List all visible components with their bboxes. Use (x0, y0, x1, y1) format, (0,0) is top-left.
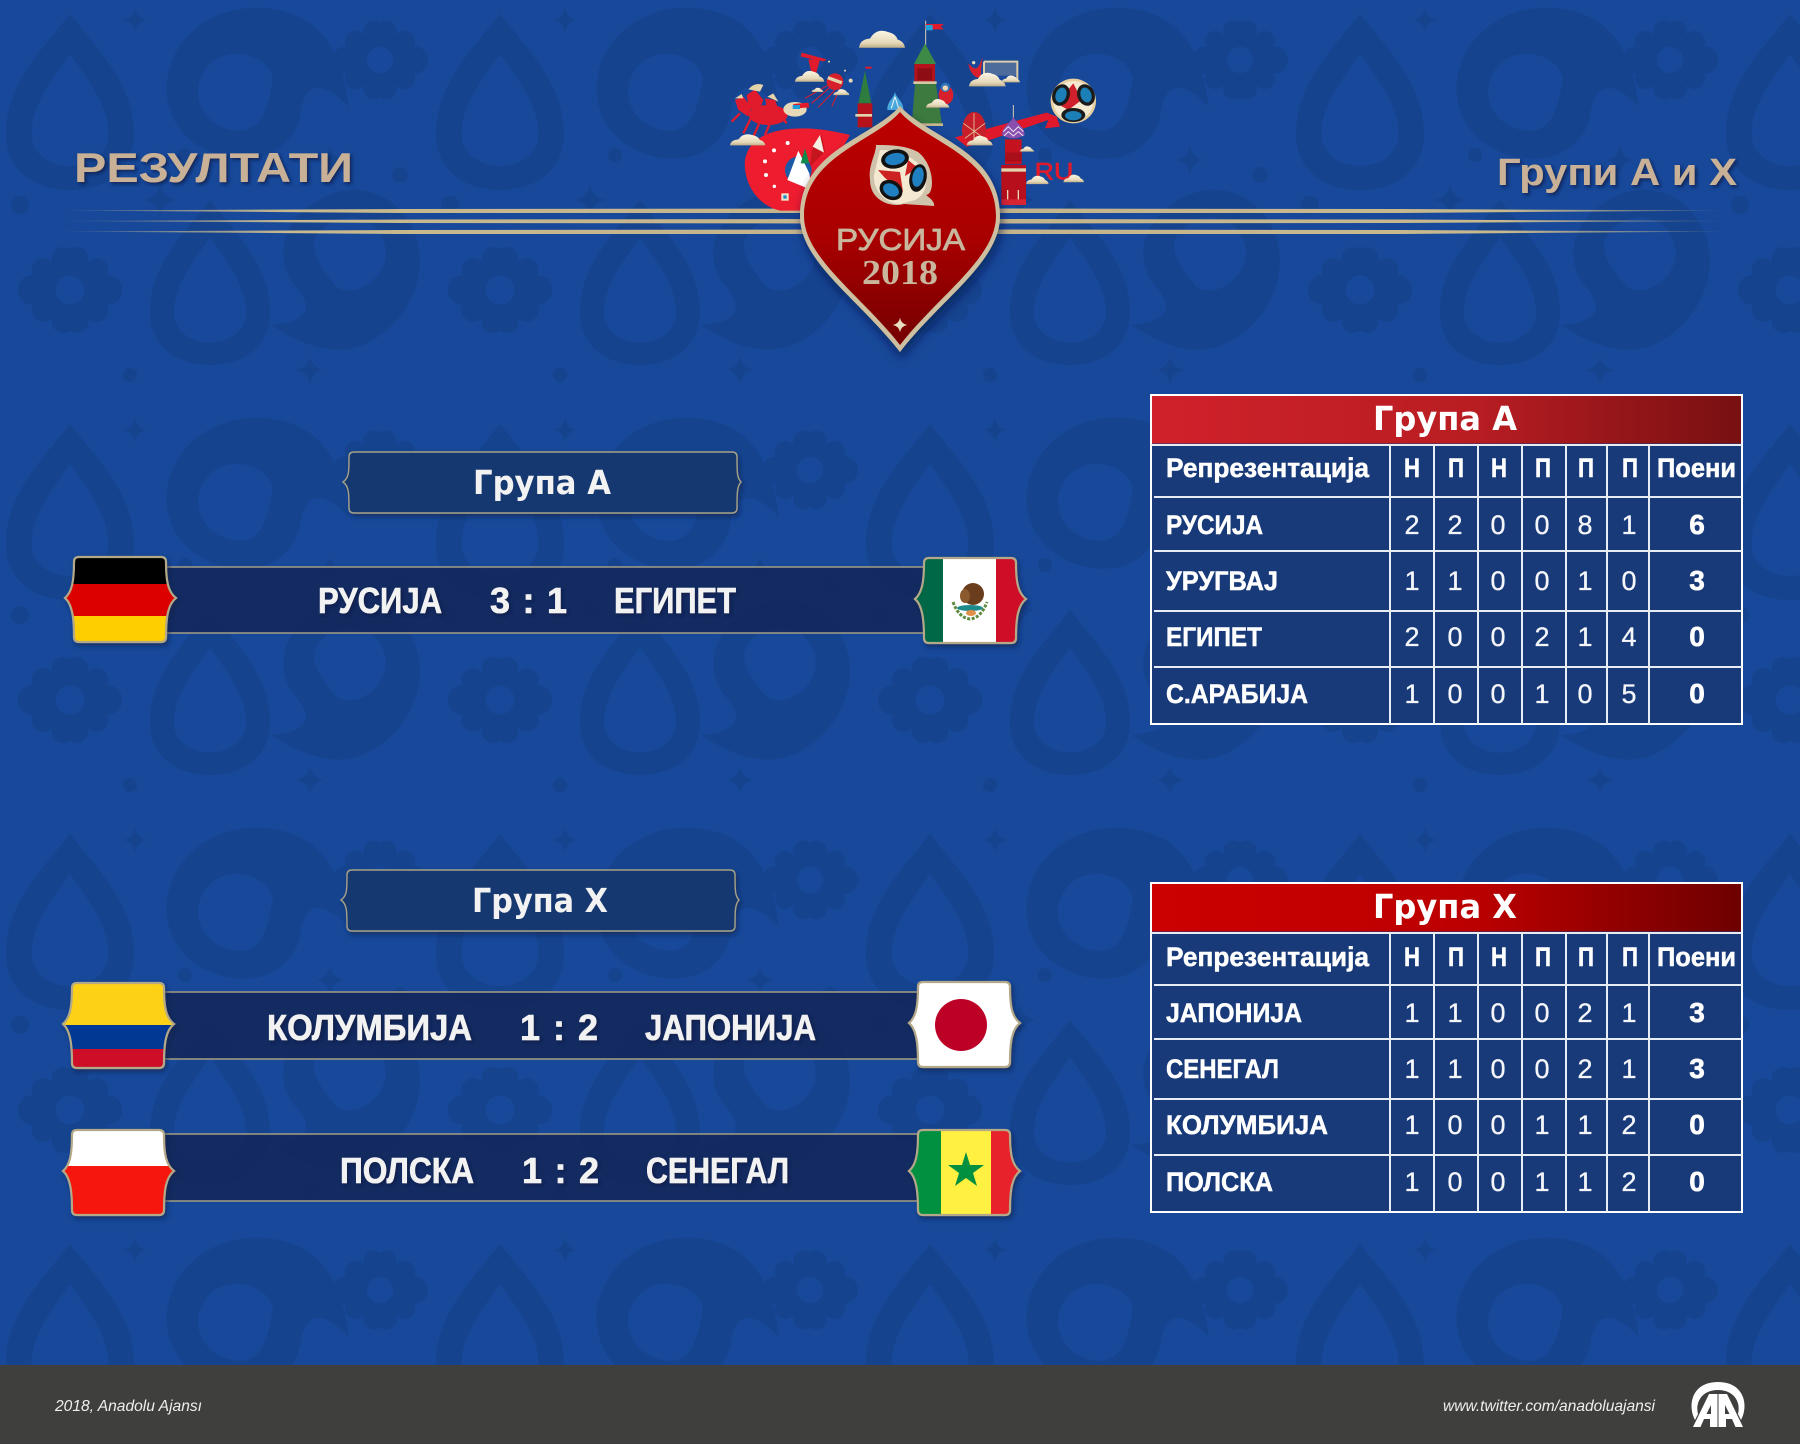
row: Uruguay: 1 (1447, 566, 1463, 596)
pill: group A (343, 452, 741, 513)
pill: group H: Група Х (472, 881, 608, 920)
icon: small spire tower (855, 67, 872, 127)
row: Uruguay: 1 (1577, 566, 1593, 596)
emblem: Russia 2018 shield (800, 106, 1000, 352)
row: Uruguay (1166, 565, 1705, 596)
pill: group H (341, 870, 739, 931)
row: Colombia: 1 (1404, 1110, 1420, 1140)
text: away team: ЕГИПЕТ (614, 580, 736, 621)
column headers (1166, 942, 1736, 972)
row: Russia: 2 (1404, 510, 1420, 540)
text: 2018: 2018 (862, 253, 938, 292)
row: Russia: 0 (1534, 510, 1550, 540)
icon: red horses (732, 84, 809, 137)
match bar: Colombia vs Japan (63, 982, 1020, 1068)
icon: ball logo (870, 145, 934, 206)
row: Colombia: 0 (1490, 1110, 1506, 1140)
row: Japan (1166, 997, 1705, 1028)
heading: groups A and H: Групи А и Х (1497, 152, 1738, 194)
row: Poland: 2 (1621, 1167, 1637, 1197)
row: Egypt: 1 (1577, 622, 1593, 652)
text: away team: СЕНЕГАЛ (646, 1150, 789, 1191)
row: Poland: 1 (1404, 1167, 1420, 1197)
row: Egypt: 4 (1621, 622, 1637, 652)
flag: Poland (63, 1130, 174, 1215)
icon: red egg (962, 112, 986, 143)
row: Egypt: ЕГИПЕТ (1166, 622, 1262, 652)
row: Uruguay: 1 (1404, 566, 1420, 596)
icon: worker figure and sputnik (801, 53, 853, 107)
illustration: Russian landmarks behind the emblem (730, 21, 1098, 211)
text: РУСИЈА: РУСИЈА (836, 222, 965, 257)
gold header rules (60, 208, 1727, 234)
row: Russia: 2 (1447, 510, 1463, 540)
text: home team: РУСИЈА (318, 580, 442, 621)
column headers: П (1622, 942, 1638, 972)
row: Egypt (1166, 621, 1705, 652)
row: Uruguay: УРУГВАЈ (1166, 566, 1278, 596)
row: Colombia: 0 (1447, 1110, 1463, 1140)
flag: Mexico (915, 558, 1026, 643)
icon: blue onion dome (887, 92, 903, 110)
header: group H (1152, 884, 1741, 932)
row: Poland: 0 (1689, 1166, 1705, 1197)
row: Saudi Arabia: 0 (1577, 679, 1593, 709)
icon: star (893, 318, 907, 332)
column headers: П (1535, 942, 1551, 972)
row: Colombia: 1 (1534, 1110, 1550, 1140)
row: Japan: 2 (1577, 998, 1593, 1028)
header: group H: Група Х (1373, 887, 1517, 926)
row: Poland (1166, 1166, 1705, 1197)
row: Senegal: СЕНЕГАЛ (1166, 1054, 1279, 1084)
row: Japan: 1 (1404, 998, 1420, 1028)
table: group H standings (1151, 883, 1742, 1212)
column headers: Поени (1657, 942, 1736, 972)
icon: big red ornament (745, 128, 850, 211)
icon: clouds (730, 31, 1084, 184)
table: group A standings (1151, 395, 1742, 724)
row: Russia: РУСИЈА (1166, 510, 1263, 540)
row: Uruguay: 0 (1490, 566, 1506, 596)
row: Poland: 0 (1490, 1167, 1506, 1197)
row: Saudi Arabia: 0 (1490, 679, 1506, 709)
row: Egypt: 0 (1490, 622, 1506, 652)
row: Colombia: КОЛУМБИЈА (1166, 1110, 1328, 1140)
row: Senegal: 1 (1621, 1054, 1637, 1084)
row: Saudi Arabia: 1 (1404, 679, 1420, 709)
header: group A: Група А (1373, 399, 1517, 438)
row: Colombia: 0 (1689, 1109, 1705, 1140)
match bar: Russia vs Egypt (65, 557, 1026, 643)
text: home team: ПОЛСКА (340, 1150, 474, 1191)
text: score: 3 : 1 (490, 580, 567, 621)
flag: Japan (909, 982, 1020, 1067)
column headers: Н (1404, 453, 1420, 483)
row: Poland: 1 (1534, 1167, 1550, 1197)
row: Japan: ЈАПОНИЈА (1166, 998, 1302, 1028)
heading: results: РЕЗУЛТАТИ (74, 144, 353, 191)
row: Egypt: 0 (1689, 621, 1705, 652)
row: Senegal: 0 (1490, 1054, 1506, 1084)
row: Senegal: 1 (1447, 1054, 1463, 1084)
text: twitter url: www.twitter.com/anadoluajansi (1443, 1398, 1655, 1415)
row: Russia (1166, 509, 1705, 540)
row: Senegal: 0 (1534, 1054, 1550, 1084)
icon: AA logo (1692, 1382, 1744, 1427)
row: Japan: 3 (1689, 997, 1705, 1028)
column headers: П (1622, 453, 1638, 483)
row: Saudi Arabia: 1 (1534, 679, 1550, 709)
column headers: П (1535, 453, 1551, 483)
row: Saudi Arabia: 0 (1689, 678, 1705, 709)
row: Poland: ПОЛСКА (1166, 1167, 1273, 1197)
column headers: П (1578, 942, 1594, 972)
icon: matryoshka doll (939, 83, 953, 104)
footer (0, 1365, 1800, 1444)
row: Russia: 8 (1577, 510, 1593, 540)
row: Saudi Arabia (1166, 678, 1705, 709)
icon: goal with figure (968, 57, 1018, 80)
flag: Senegal (909, 1130, 1020, 1215)
row: Uruguay: 0 (1621, 566, 1637, 596)
text: home team: КОЛУМБИЈА (267, 1007, 472, 1048)
row: Colombia: 2 (1621, 1110, 1637, 1140)
text: score: 1 : 2 (520, 1007, 598, 1048)
column headers: Репрезентација (1166, 453, 1370, 483)
row: Egypt: 0 (1447, 622, 1463, 652)
column headers: Н (1491, 453, 1507, 483)
column headers: Поени (1657, 453, 1736, 483)
flag: Colombia (63, 983, 174, 1068)
row: Poland: 0 (1447, 1167, 1463, 1197)
row: Japan: 0 (1490, 998, 1506, 1028)
row: Uruguay: 3 (1689, 565, 1705, 596)
text: credit: 2018, Anadolu Ajansı (54, 1398, 202, 1415)
icon: red tower with purple dome (1001, 105, 1026, 205)
row: Russia: 6 (1689, 509, 1705, 540)
row: Egypt: 2 (1534, 622, 1550, 652)
column headers: П (1578, 453, 1594, 483)
row: Japan: 1 (1621, 998, 1637, 1028)
row: Saudi Arabia: 0 (1447, 679, 1463, 709)
icon: green Kremlin tower (911, 21, 944, 126)
column headers: Н (1404, 942, 1420, 972)
column headers: Репрезентација (1166, 942, 1370, 972)
row: Russia: 1 (1621, 510, 1637, 540)
text: RU domain mark: RU (1035, 158, 1073, 185)
row: Senegal: 3 (1689, 1053, 1705, 1084)
row: Egypt: 2 (1404, 622, 1420, 652)
row: Japan: 0 (1534, 998, 1550, 1028)
column headers (1166, 453, 1736, 483)
column headers: Н (1491, 942, 1507, 972)
match bar: Poland vs Senegal (63, 1130, 1020, 1215)
row: Saudi Arabia: 5 (1621, 679, 1637, 709)
text: away team: ЈАПОНИЈА (645, 1007, 816, 1048)
pill: group A: Група А (473, 463, 611, 502)
row: Senegal: 2 (1577, 1054, 1593, 1084)
column headers: П (1448, 453, 1464, 483)
row: Poland: 1 (1577, 1167, 1593, 1197)
row: Japan: 1 (1447, 998, 1463, 1028)
icon: red ribbon (955, 113, 1060, 147)
row: Colombia: 1 (1577, 1110, 1593, 1140)
column headers: П (1448, 942, 1464, 972)
header: group A (1152, 396, 1741, 444)
row: Uruguay: 0 (1534, 566, 1550, 596)
row: Senegal (1166, 1053, 1705, 1084)
row: Colombia (1166, 1109, 1705, 1140)
icon: football with ribbon (1049, 79, 1098, 123)
row: Russia: 0 (1490, 510, 1506, 540)
row: Saudi Arabia: С.АРАБИЈА (1166, 679, 1308, 709)
text: score: 1 : 2 (522, 1150, 599, 1191)
flag: Germany (65, 557, 176, 642)
row: Senegal: 1 (1404, 1054, 1420, 1084)
